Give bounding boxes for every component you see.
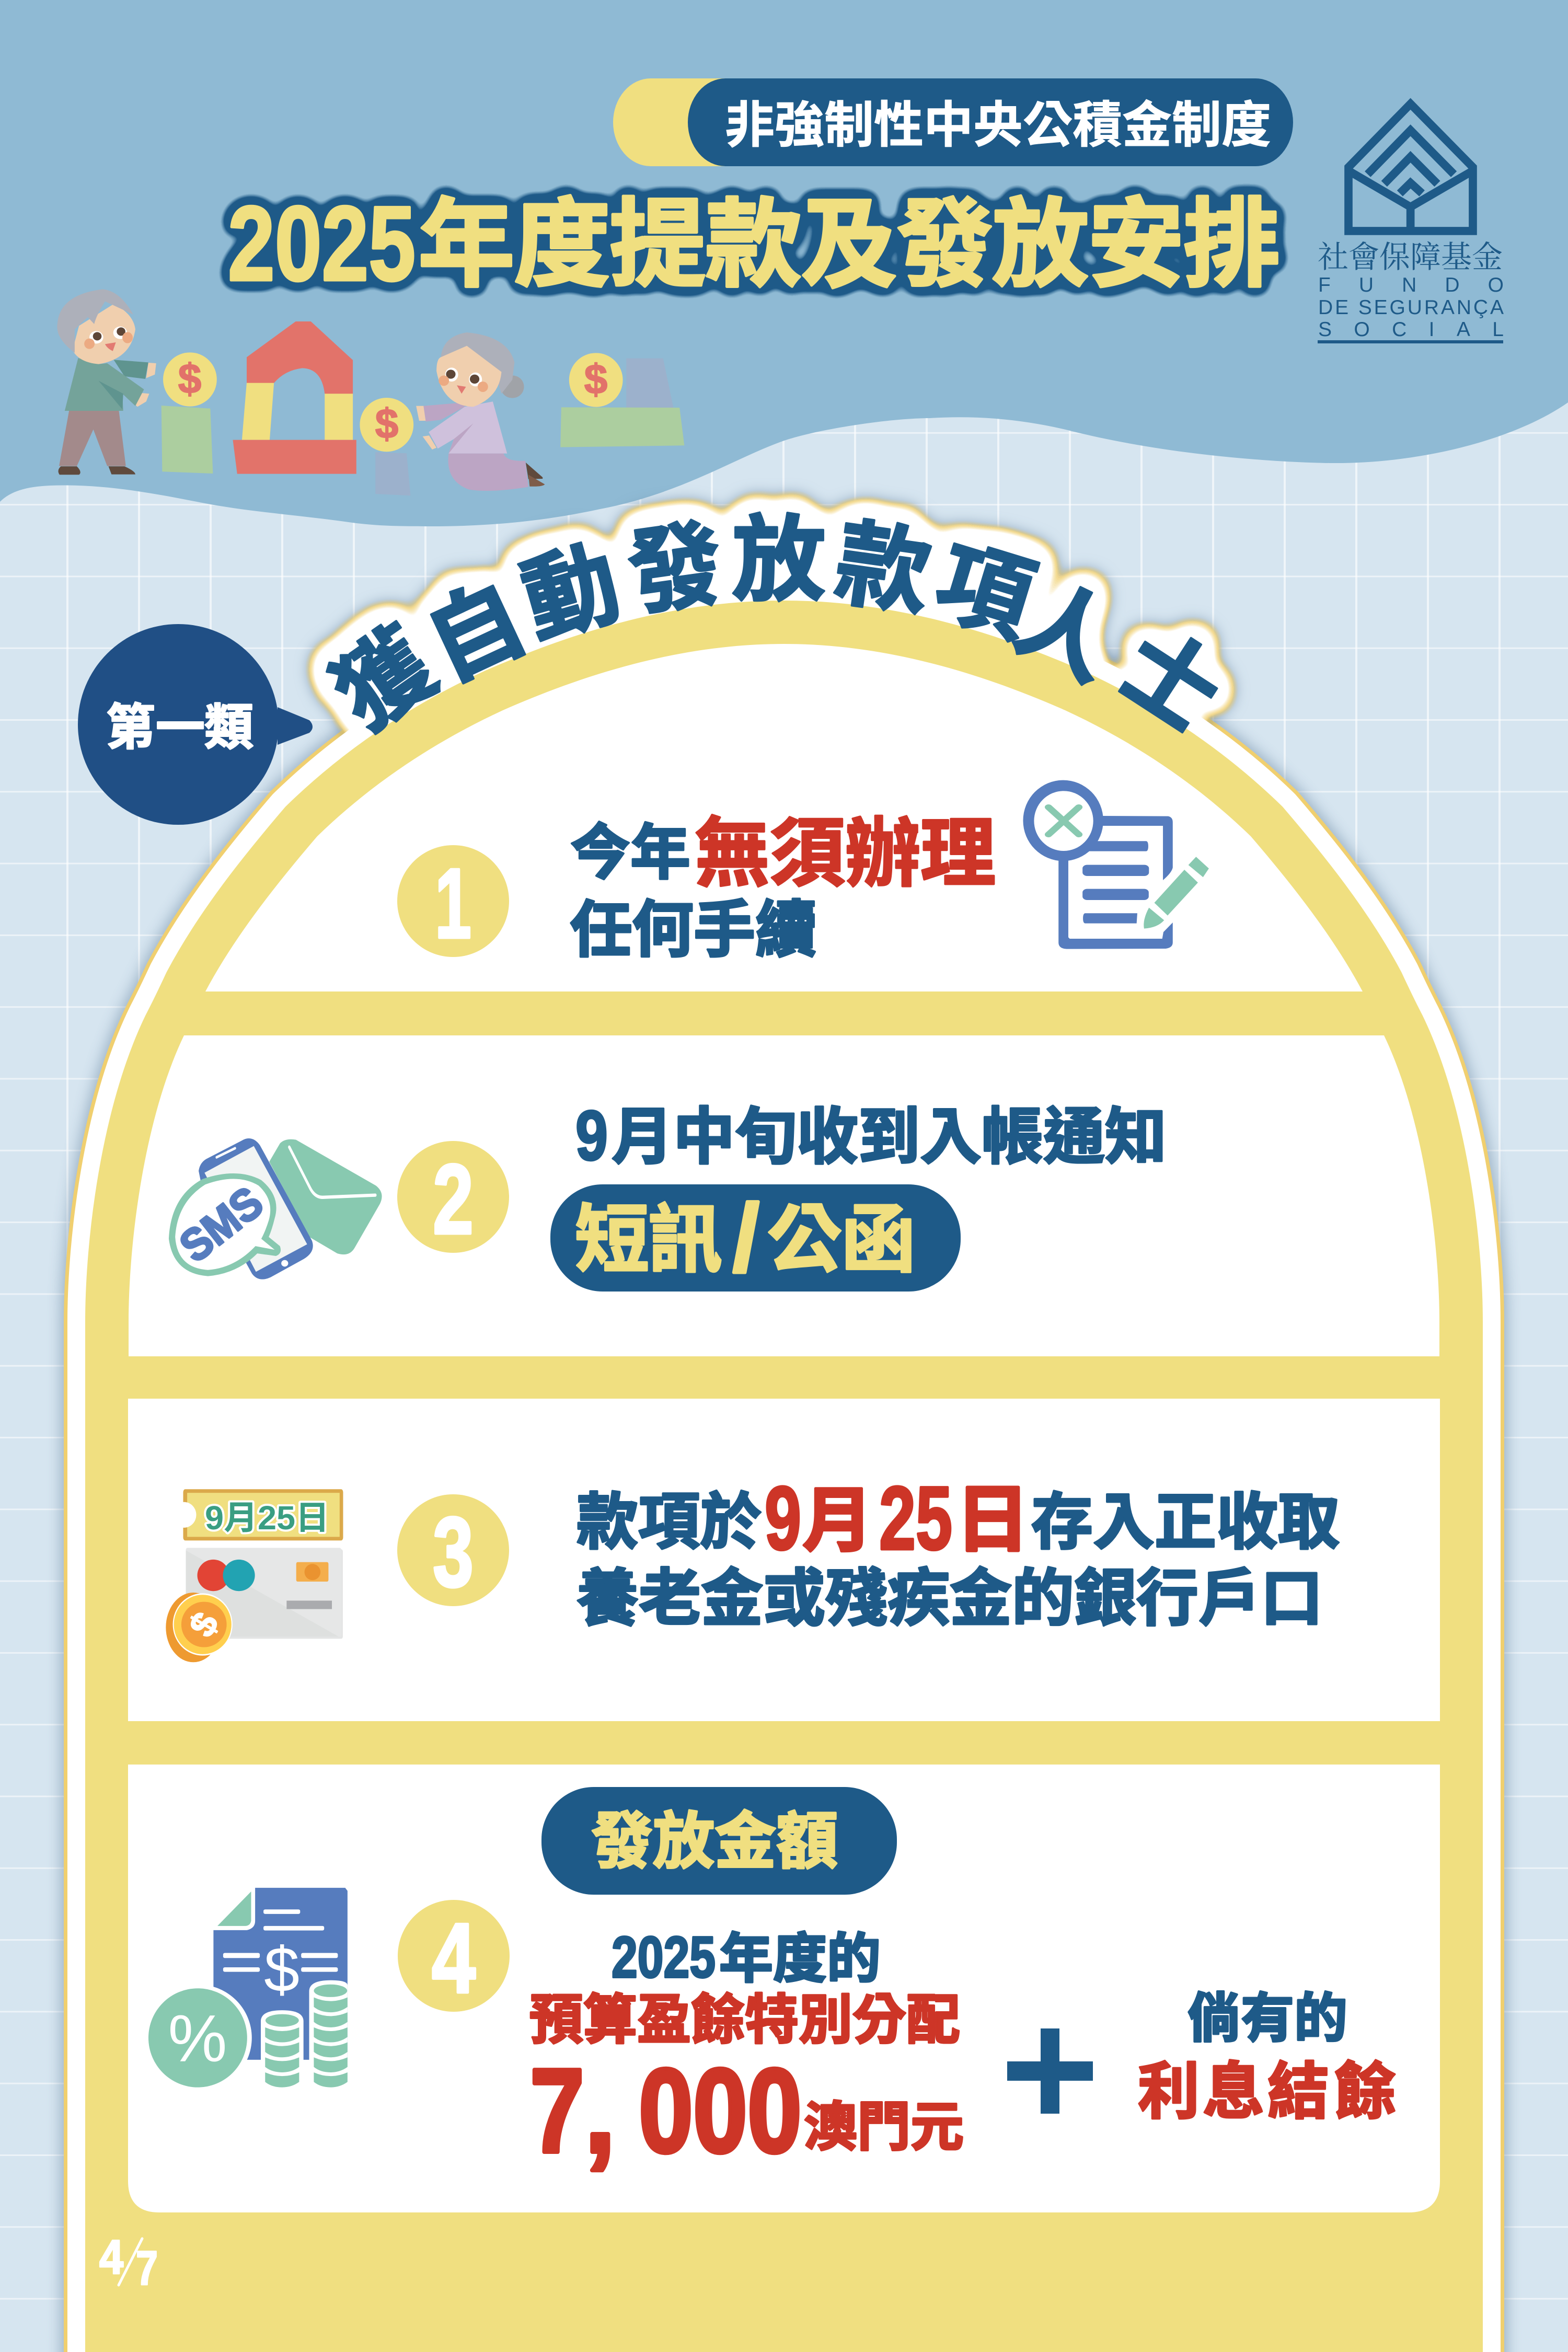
page number: 4	[99, 2231, 123, 2284]
panel 3 text	[577, 1468, 1340, 1633]
panel 1 text: 無須辦理	[695, 812, 996, 896]
step number 1: 1	[435, 848, 471, 959]
icon: dated ticket, bank card and coin: 9月25日	[205, 1499, 329, 1537]
arch shadow	[129, 644, 1439, 2352]
panel 2: notification	[105, 1035, 1463, 1356]
interest balance: 利息結餘	[1138, 2058, 1396, 2127]
illustration: seniors with blocks and coins	[57, 289, 684, 495]
budget surplus allocation: 2025	[612, 1925, 716, 1990]
panel 3 text: 25	[879, 1468, 952, 1569]
panel 3 text: 養老金或殘疾金的銀行戶口	[577, 1564, 1323, 1633]
pill: payment amount	[541, 1787, 897, 1895]
pill: SMS / letter	[550, 1184, 961, 1292]
logo: Fundo de Segurança Social: DE SEGURANÇA	[1318, 296, 1504, 319]
header wave	[0, 0, 1568, 526]
illustration: seniors with blocks and coins: $	[584, 356, 607, 402]
budget surplus allocation: 7	[530, 2045, 584, 2177]
logo: Fundo de Segurança Social	[1318, 104, 1504, 343]
arch white ring	[129, 644, 1439, 2352]
icon: dated ticket, bank card and coin: $	[181, 1606, 227, 1643]
step number 2: 2	[433, 1144, 474, 1255]
plus sign	[1007, 2028, 1093, 2114]
elderly woman	[416, 332, 545, 491]
pill: SMS / letter: 短訊	[575, 1198, 722, 1282]
panel 3 text: 日	[956, 1479, 1029, 1561]
panel 3 text: 9	[765, 1468, 801, 1569]
panel 3 text: 月	[802, 1481, 873, 1560]
sticker heading text: 獲自動發放款項人士	[316, 508, 1238, 751]
panel 4: amount	[128, 1765, 1440, 2212]
step number 4: 4	[432, 1903, 476, 2014]
heading sticker halo: 獲自動發放款項人士	[316, 508, 1238, 751]
budget surplus allocation: ,	[584, 2045, 616, 2177]
icon: document, percent and coin stacks	[144, 1888, 348, 2091]
subtitle pill: 非強制性中央公積金制度	[725, 98, 1271, 153]
logo: Fundo de Segurança Social: SOCIAL	[1318, 318, 1504, 341]
pill: payment amount: 發放金額	[591, 1807, 838, 1876]
icon: SMS phone and envelope: SMS	[170, 1177, 272, 1272]
category bubble: 第一類	[106, 700, 253, 755]
main title: 2025	[228, 185, 416, 303]
page number	[99, 2231, 158, 2295]
subtitle pill	[613, 78, 1293, 166]
main title: 年度提款及發放安排	[418, 191, 1280, 299]
page number: 7	[136, 2242, 158, 2295]
panel 1: no procedures	[205, 644, 1363, 991]
arch yellow band	[129, 644, 1439, 2352]
budget surplus allocation: 澳門元	[804, 2097, 964, 2157]
pill: SMS / letter: 公函	[767, 1198, 916, 1282]
arch outer outline	[129, 644, 1439, 2352]
panel 3 text: 存入正收取	[1031, 1488, 1340, 1557]
budget surplus allocation: 年度的	[719, 1929, 881, 1989]
logo: Fundo de Segurança Social: FUNDO	[1318, 274, 1504, 296]
interest balance	[1138, 1989, 1396, 2127]
icon: document, percent and coin stacks: $	[264, 1934, 299, 2005]
illustration: seniors with blocks and coins: $	[375, 400, 398, 447]
budget surplus allocation: 預算盈餘特別分配	[529, 1990, 960, 2050]
elderly man	[57, 289, 156, 475]
step number 2	[397, 1141, 509, 1255]
category bubble	[78, 624, 313, 825]
panel 2 heading: 月中旬收到入帳通知	[612, 1103, 1167, 1172]
budget surplus allocation	[529, 1925, 964, 2177]
logo: Fundo de Segurança Social: 社會保障基金	[1318, 232, 1503, 276]
red and yellow block house	[233, 321, 356, 474]
icon: document with pencil	[1023, 780, 1209, 949]
icon: dated ticket, bank card and coin	[166, 1489, 343, 1662]
panel 3: payment date	[128, 1399, 1440, 1721]
panel 1 text	[570, 812, 996, 965]
interest balance: 倘有的	[1187, 1989, 1347, 2048]
illustration: seniors with blocks and coins: $	[178, 355, 201, 402]
step number 4	[398, 1900, 510, 2014]
step number 3: 3	[433, 1497, 474, 1608]
budget surplus allocation: 000	[639, 2045, 802, 2177]
panel 1 text: 今年	[570, 820, 690, 886]
step number 3	[397, 1494, 509, 1608]
panel 1 text: 任何手續	[570, 896, 817, 965]
panel 3 text: 款項於	[577, 1488, 762, 1557]
icon: SMS phone and envelope	[169, 1138, 382, 1279]
icon: document, percent and coin stacks: %	[168, 2001, 227, 2076]
panel 2 heading: 9	[575, 1096, 608, 1175]
step number 1	[397, 845, 509, 959]
pill: SMS / letter: /	[733, 1184, 759, 1291]
